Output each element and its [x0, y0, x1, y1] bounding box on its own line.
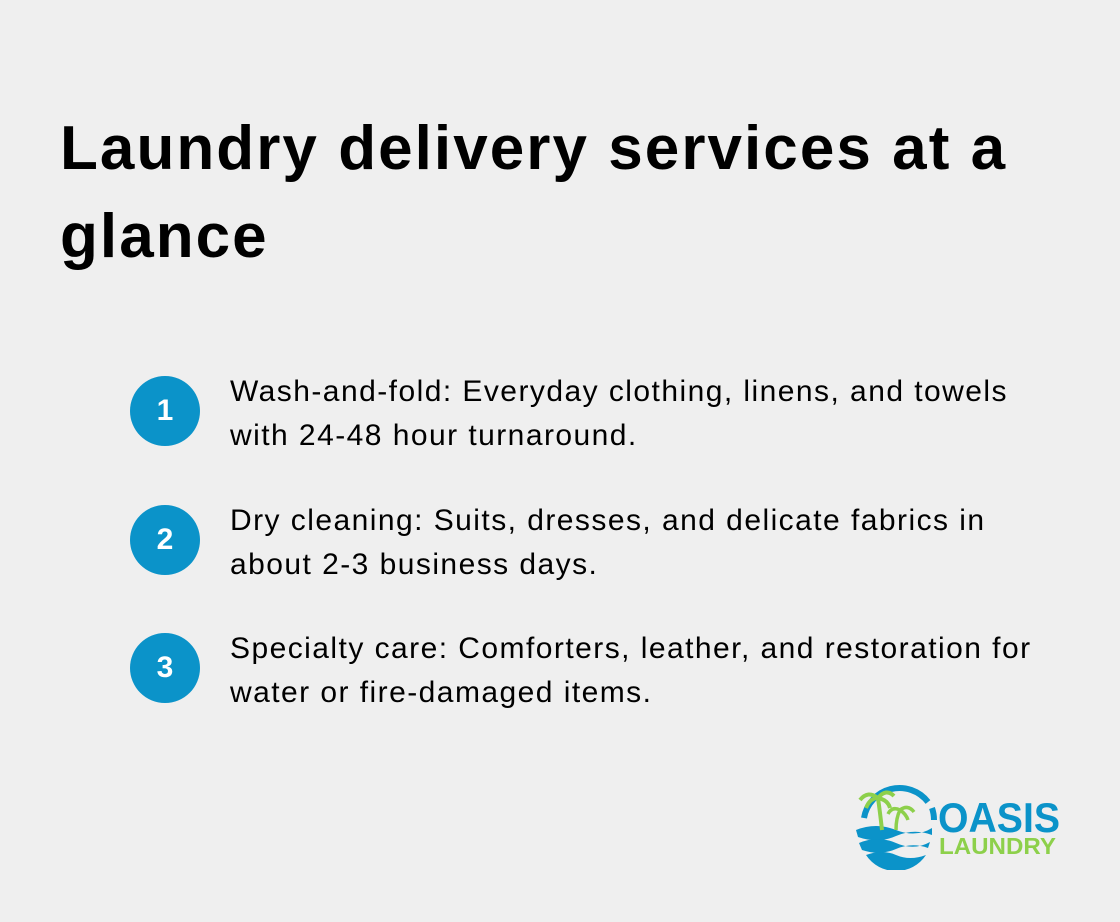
text 1: [230, 375, 1008, 452]
number badge 2: 2: [157, 523, 173, 556]
title: Laundry delivery services at a: [60, 114, 1007, 183]
text 2: [230, 504, 986, 581]
logo text: OASIS: [938, 794, 1060, 841]
logo text: [938, 794, 1060, 859]
number badge 3: [130, 633, 200, 703]
item 3: [130, 632, 1032, 709]
logo: [856, 785, 1060, 870]
text 1: with 24-48 hour turnaround.: [230, 419, 638, 452]
item 1: [130, 375, 1008, 452]
text 1: Wash-and-fold: Everyday clothing, linens, and towels: [230, 375, 1008, 408]
text 2: about 2-3 business days.: [230, 548, 598, 581]
title: glance: [60, 202, 269, 271]
text 2: Dry cleaning: Suits, dresses, and delicate fabrics in: [230, 504, 986, 537]
number badge 3: 3: [157, 651, 173, 684]
text 3: water or fire-damaged items.: [230, 676, 652, 709]
number badge 1: 1: [157, 394, 173, 427]
logo text: LAUNDRY: [939, 833, 1056, 859]
icon: logo emblem: [856, 788, 934, 871]
number badge 1: [130, 376, 200, 446]
title: [60, 114, 1007, 271]
number badge 2: [130, 505, 200, 575]
text 3: [230, 632, 1032, 709]
text 3: Specialty care: Comforters, leather, and restoration for: [230, 632, 1032, 665]
item 2: [130, 504, 986, 581]
